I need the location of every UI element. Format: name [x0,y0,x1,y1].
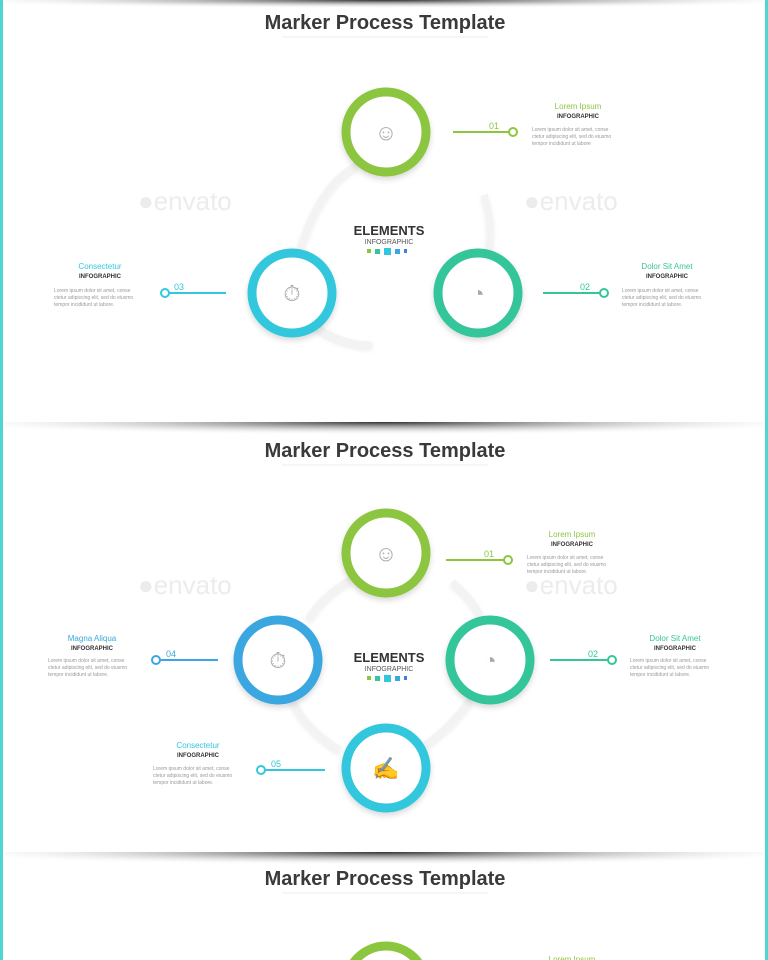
step 2-05: INFOGRAPHIC [177,753,220,759]
title 1: Marker Process Template [265,12,505,34]
step 2-01: 01 [484,549,494,559]
connectors 2 [292,580,482,750]
center label 2 [354,650,425,682]
step 2-04: tempor incididunt ut labore. [48,672,108,678]
circle 2-04 [238,620,318,700]
step 02: INFOGRAPHIC [646,274,689,280]
step 03: tempor incididunt ut labore. [54,302,114,308]
connectors [300,166,490,345]
step 03: INFOGRAPHIC [79,274,122,280]
step 2-02: INFOGRAPHIC [654,646,697,652]
circle 03 [252,253,332,333]
circle 2-02: ◔ [483,648,497,673]
step 01: ctetur adipiscing elit, sed do eiusmo [532,134,611,140]
step 2-04: Magna Aliqua [68,634,117,643]
watermarks 2: ●envato [524,570,618,600]
circle 2-01: ☺ [375,541,397,566]
step 02: Lorem ipsum dolor sit amet, conse [622,288,699,294]
step 02: 02 [580,282,590,292]
step 01: tempor incididunt ut labore [532,141,591,147]
step 02: tempor incididunt ut labore. [622,302,682,308]
center label 2: ELEMENTS [354,650,425,665]
step 2-05: 05 [271,759,281,769]
step 2-04: INFOGRAPHIC [71,646,114,652]
step 2-01: Lorem Ipsum [549,530,596,539]
title 2: Marker Process Template [265,440,505,462]
step 03: ctetur adipiscing elit, sed do eiusmo [54,295,133,301]
step 2-01: tempor incididunt ut labore. [527,569,587,575]
step 01: Lorem Ipsum [555,102,602,111]
step 2-02: Lorem ipsum dolor sit amet, conse [630,658,707,664]
step 2-01: Lorem ipsum dolor sit amet, conse [527,555,604,561]
step 03: Consectetur [78,262,122,271]
step 01: 01 [489,121,499,131]
step 02 [543,262,701,308]
watermarks: ●envato [138,186,232,216]
center label: ELEMENTS [354,223,425,238]
step 2-05: Consectetur [176,741,220,750]
step 2-04: ctetur adipiscing elit, sed do eiusmo [48,665,127,671]
circle 01 [346,92,426,172]
circle 03: ⏱ [283,281,301,306]
step 03: 03 [174,282,184,292]
step 2-02: Dolor Sit Amet [649,634,701,643]
center label [354,223,425,255]
step 03 [54,262,226,308]
circle 2-04: ⏱ [269,648,287,673]
center label 2: INFOGRAPHIC [365,666,413,673]
step 2-02: 02 [588,649,598,659]
step 2-05: Lorem ipsum dolor sit amet, conse [153,766,230,772]
step 2-02 [550,634,709,678]
circle 02 [438,253,518,333]
watermarks: ●envato [524,186,618,216]
watermarks 2 [138,570,618,600]
panel 3 [265,868,596,960]
title 3: Marker Process Template [265,868,505,890]
circle 01: ☺ [375,120,397,145]
step 01 [453,102,611,147]
step 01: Lorem ipsum dolor sit amet, conse [532,127,609,133]
panel 2 [48,440,709,808]
circle 3-01 partial [346,946,426,960]
center label: INFOGRAPHIC [365,239,413,246]
step 2-05: tempor incididunt ut labore. [153,780,213,786]
circle 2-01 [346,513,426,593]
step 01: INFOGRAPHIC [557,114,600,120]
circle 2-02 [450,620,530,700]
step 2-01: INFOGRAPHIC [551,542,594,548]
step 2-02: ctetur adipiscing elit, sed do eiusmo [630,665,709,671]
step 2-04: Lorem ipsum dolor sit amet, conse [48,658,125,664]
step 2-01: ctetur adipiscing elit, sed do eiusmo [527,562,606,568]
step 02: ctetur adipiscing elit, sed do eiusmo [622,295,701,301]
step 03: Lorem ipsum dolor sit amet, conse [54,288,131,294]
watermarks 2: ●envato [138,570,232,600]
step 02: Dolor Sit Amet [641,262,693,271]
circle 2-05: ✍ [372,756,400,781]
circle 2-05 [346,728,426,808]
circle 02: ◔ [471,281,485,306]
step 2-01 [446,530,606,575]
step 2-02: tempor incididunt ut labore. [630,672,690,678]
step 2-05: ctetur adipiscing elit, sed do eiusmo [153,773,232,779]
step 2-04 [48,634,218,678]
step 2-04: 04 [166,649,176,659]
watermarks [138,186,618,216]
step 2-05 [153,741,325,786]
panel 1 [54,12,701,345]
